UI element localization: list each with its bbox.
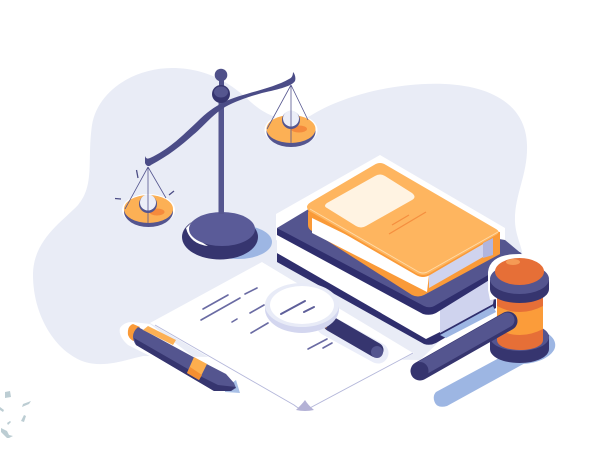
icon: gavel [412, 254, 551, 380]
document text lines [201, 288, 332, 349]
lower book pages [277, 230, 500, 339]
gavel upper cap [490, 258, 549, 303]
icon: balance scales [115, 69, 318, 260]
pen halo [120, 322, 240, 394]
scales beam [145, 72, 295, 166]
cover highlight line [310, 209, 498, 273]
orange book back cover [308, 212, 500, 296]
icon: pen [120, 322, 240, 394]
lower book page side [440, 277, 493, 333]
scales right pan [264, 85, 318, 147]
magnified text [281, 301, 314, 314]
pen body [133, 327, 236, 391]
spark marks [115, 170, 174, 199]
pen tail [128, 324, 140, 341]
scales pole [218, 100, 224, 214]
gavel handle [412, 320, 508, 380]
background blob [33, 68, 527, 364]
orange book cover thickness [308, 205, 500, 277]
panel: book stack [276, 155, 525, 345]
gavel barrel [497, 288, 543, 350]
icon: magnifying glass [265, 283, 383, 358]
specks: bottom-left confetti [0, 391, 31, 438]
magnifier handle [331, 324, 376, 350]
magnifier handle halo [327, 325, 378, 353]
panel: document sheet [150, 262, 414, 411]
magnifier rim [265, 285, 339, 333]
cover label [325, 174, 414, 228]
pen clip [143, 326, 176, 345]
book halo [276, 155, 505, 300]
lower book cover edge [277, 228, 525, 315]
lower book top cover [277, 207, 523, 307]
document fold corner [296, 400, 314, 411]
band: blob strip beside books [262, 252, 425, 353]
orange book pages [312, 218, 429, 292]
blue shadow strip [440, 306, 496, 338]
gavel lower cap [490, 323, 549, 363]
scales base [182, 212, 258, 260]
scales knob [212, 69, 230, 103]
pen band [187, 357, 207, 380]
orange book page side [429, 244, 483, 288]
scales left pan [122, 167, 175, 227]
lower book back cover [277, 253, 496, 345]
shadow: gavel [434, 330, 555, 407]
cover lines [389, 212, 426, 234]
orange book spine end [483, 238, 493, 258]
pen underside [134, 338, 236, 391]
orange book top cover [307, 163, 498, 275]
shadow: base of scales [204, 225, 272, 259]
gavel head halo [488, 254, 551, 300]
